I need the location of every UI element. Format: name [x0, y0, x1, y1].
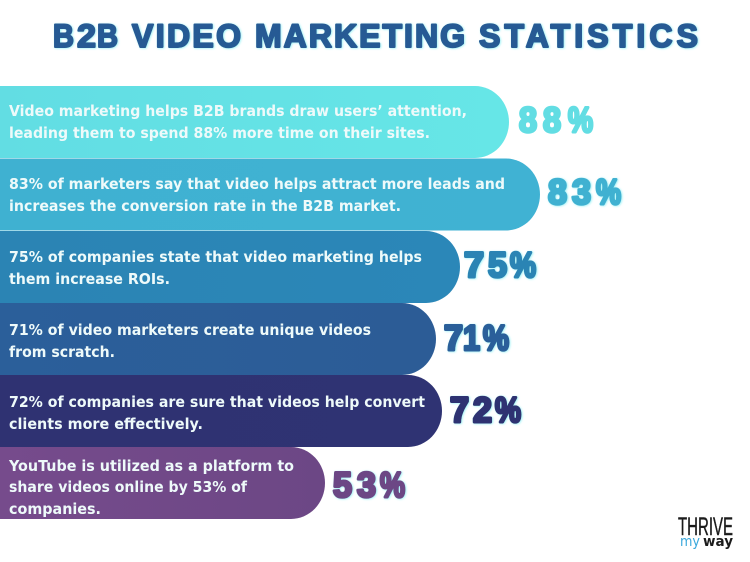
text: 53% statement: companies. [9, 500, 101, 518]
value: 71%: % [483, 319, 509, 358]
bar: 83% [0, 158, 540, 230]
panel: 71% statistic [0, 303, 509, 375]
logo: Thrive My Way [678, 513, 733, 550]
value: 71%: 7 [444, 319, 463, 358]
text: 53% statement: share videos online by 53% of [9, 478, 247, 496]
value: 71%: 1 [463, 319, 480, 358]
value: 53%: % [380, 466, 405, 505]
value: 83%: 8 [548, 173, 567, 212]
value: 72%: % [495, 391, 521, 430]
panel: 72% statistic [0, 375, 521, 447]
value: 88%: % [568, 101, 593, 140]
text: 53% statement: YouTube is utilized as a platform to [8, 457, 294, 475]
value: 53%: 3 [357, 466, 376, 505]
bar: 53% [0, 447, 325, 519]
text: 72% statement: clients more effectively. [9, 415, 203, 433]
value: 72%: 2 [473, 391, 492, 430]
value: 83%: 3 [572, 173, 591, 212]
text: 88% statement: leading them to spend 88% more time on their sites. [9, 124, 430, 142]
title: STATISTICS [479, 18, 698, 54]
value: 75%: 7 [464, 246, 484, 285]
title: 2 [77, 18, 96, 54]
text: 75% statement: them increase ROIs. [9, 270, 170, 288]
value: 88%: 8 [543, 101, 561, 140]
text: 71% statement: from scratch. [9, 343, 115, 361]
panel: 88% statistic [0, 86, 593, 158]
value: 83%: % [596, 173, 621, 212]
panel: 53% statistic [0, 447, 405, 519]
value: 72%: 7 [450, 391, 469, 430]
value: 75%: 5 [488, 246, 507, 285]
text: 75% statement: 75% of companies state that video marketing helps [9, 248, 422, 266]
text: 83% statement: 83% of marketers say that video helps attract more leads and [9, 175, 505, 193]
panel: 75% statistic [0, 231, 536, 303]
title: B [53, 18, 74, 54]
value: 88%: 8 [519, 101, 537, 140]
text: 83% statement: increases the conversion rate in the B2B market. [9, 197, 401, 215]
text: 72% statement: 72% of companies are sure that videos help convert [9, 393, 426, 411]
bar: 75% [0, 231, 460, 303]
value: 75%: % [510, 246, 536, 285]
text: 71% statement: 71% of video marketers create unique videos [9, 321, 371, 339]
bar: 88% [0, 86, 509, 158]
text: 88% statement: Video marketing helps B2B brands draw users’ attention, [9, 102, 467, 120]
logo: Thrive My Way: way [703, 534, 733, 550]
title: VIDEO [132, 18, 241, 54]
title: MARKETING [255, 18, 465, 54]
value: 53%: 5 [333, 466, 352, 505]
panel: 83% statistic [0, 158, 621, 230]
logo: Thrive My Way: my [680, 534, 700, 550]
bar: 71% [0, 303, 436, 375]
bar: 72% [0, 375, 442, 447]
title: B [97, 18, 118, 54]
